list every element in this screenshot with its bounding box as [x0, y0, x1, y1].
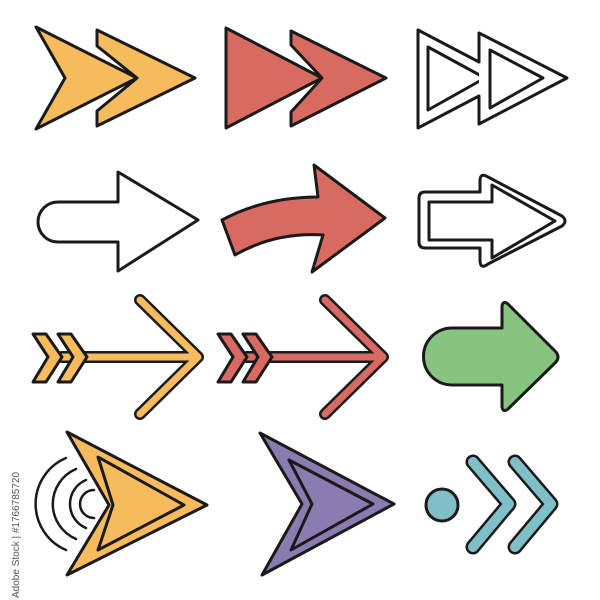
icon: yellow arrowhead with sound arcs: [36, 432, 207, 575]
icon: red fast-forward: [226, 28, 386, 128]
icon: purple arrowhead: [260, 433, 394, 575]
icon: red feathered arrow: [218, 300, 383, 414]
icon: yellow double arrow: [36, 27, 195, 129]
icon: red curved arrow: [222, 165, 385, 272]
icon: outline double arrow: [419, 175, 565, 266]
watermark text: Adobe Stock | #1766785720: [11, 472, 22, 598]
icon: teal dot and chevrons: [426, 462, 551, 547]
icon: white arrow: [38, 172, 198, 271]
icon: outline fast-forward: [418, 30, 567, 128]
icon: green arrow: [424, 302, 558, 411]
icon: yellow feathered arrow: [33, 300, 198, 414]
